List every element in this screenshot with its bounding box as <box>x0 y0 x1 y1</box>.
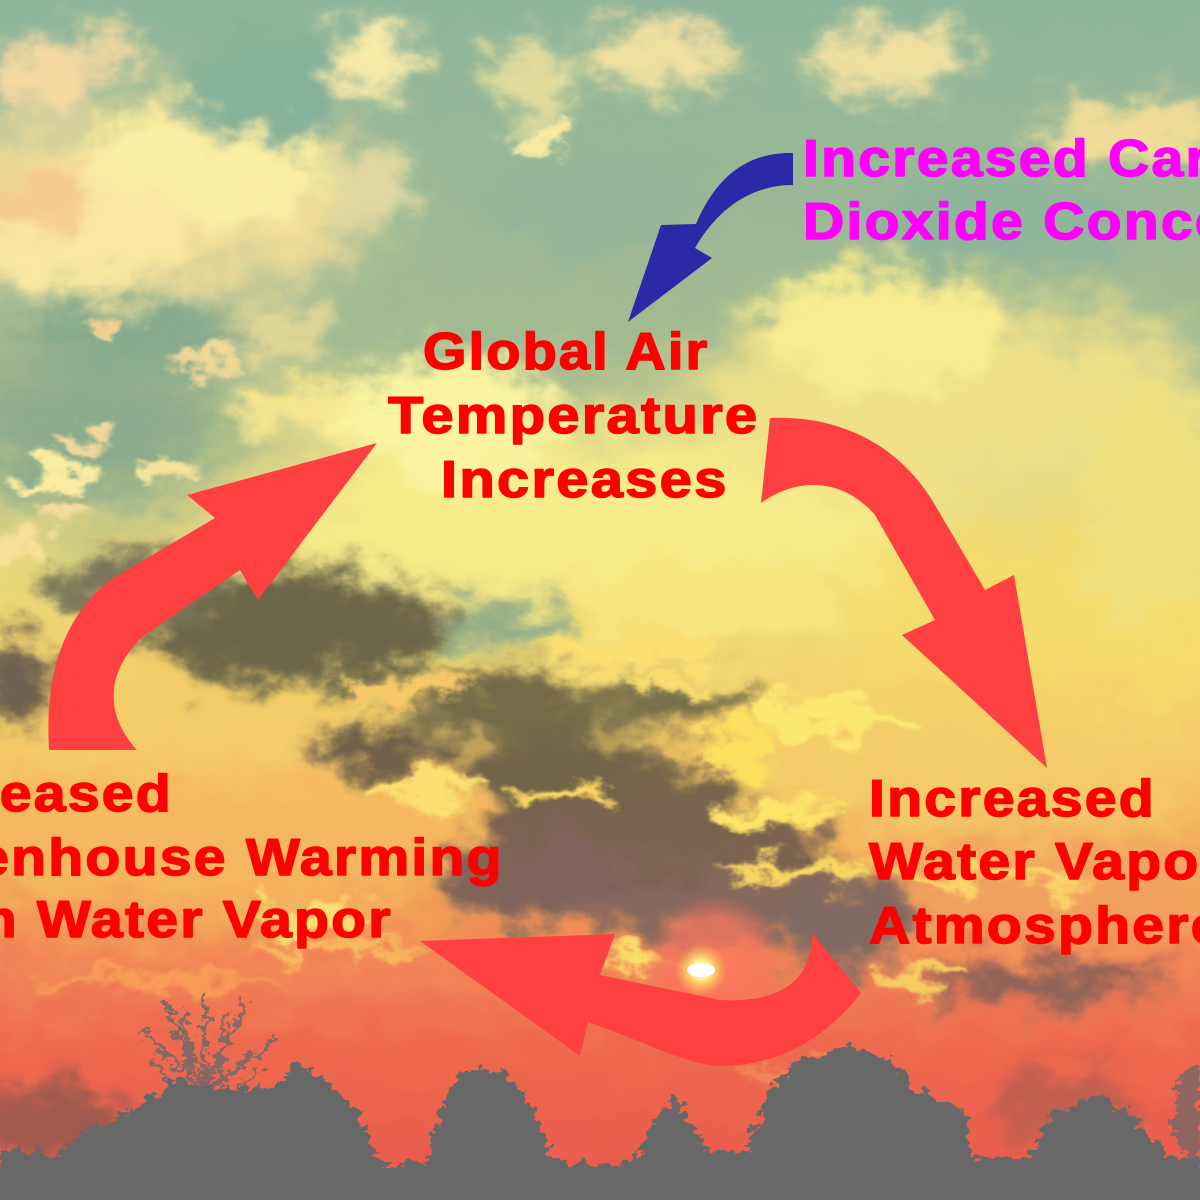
label: increased greenhouse warming from water vapor (cropped) <box>0 764 504 948</box>
label: global air temperature increases: Increases <box>441 450 729 508</box>
label: global air temperature increases: Temperature <box>388 386 759 444</box>
arrow: temperature to water vapor <box>761 418 1047 768</box>
arrow: carbon dioxide to temperature <box>628 153 793 322</box>
arrow: greenhouse warming to temperature <box>48 443 377 750</box>
label: global air temperature increases: Global Air <box>423 323 709 381</box>
heading: Increased Carbon Dioxide Concentration (cropped) <box>803 129 1200 250</box>
sun <box>645 895 785 1035</box>
label: global air temperature increases <box>388 323 759 508</box>
arrow: water vapor to greenhouse warming <box>420 933 861 1066</box>
label: increased water vapor in atmosphere (cropped): Increased <box>869 769 1156 827</box>
dark clouds <box>150 572 450 688</box>
low haze behind trees <box>0 1085 130 1165</box>
tree silhouettes <box>0 1000 1200 1200</box>
label: increased water vapor in atmosphere (cropped) <box>869 769 1200 954</box>
